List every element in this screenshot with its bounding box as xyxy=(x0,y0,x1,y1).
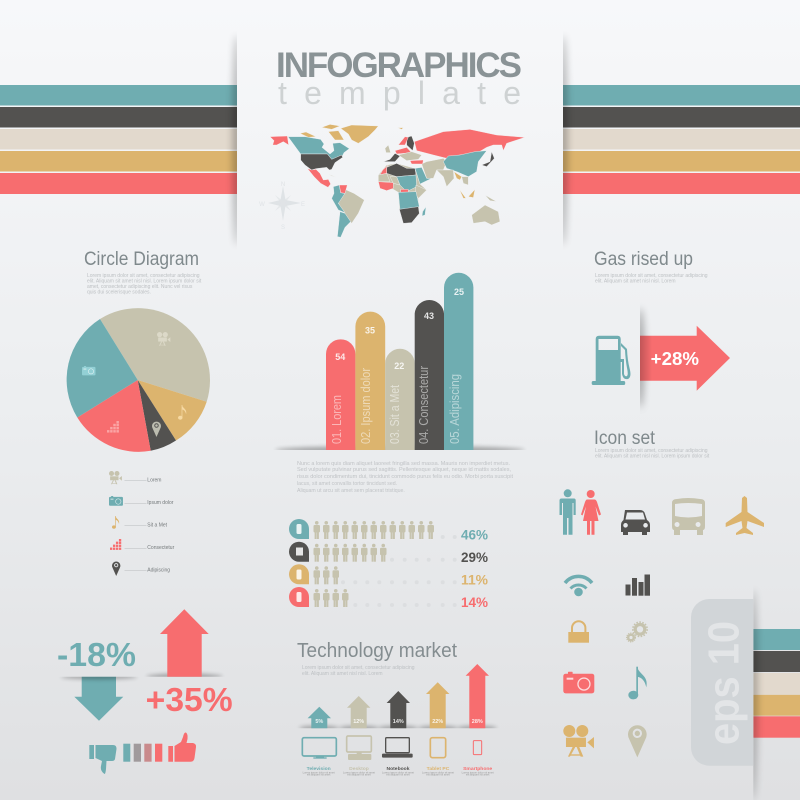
bar: ipsum dolor: 02. Ipsum dolor xyxy=(359,368,373,444)
device: tablet: Lorem ipsum dolor sit amet xyxy=(422,770,454,774)
heading: technology market: Technology market xyxy=(297,640,457,662)
compass: W xyxy=(259,202,265,208)
bar: consectetur: 43 xyxy=(424,311,434,321)
legend: sit a met: Sit a Met xyxy=(147,522,168,528)
arrow: down xyxy=(61,674,137,721)
device: smartphone: Smartphone xyxy=(463,766,492,772)
text: circle diagram description: elit. Aliquam sit amet nisl nisl. Lorem ipsum dolor sit xyxy=(87,278,202,284)
icon: gas pump xyxy=(592,336,630,385)
bar: sit a met xyxy=(385,349,415,450)
legend: ipsum dolor: Ipsum dolor xyxy=(147,500,174,506)
bar: lorem xyxy=(326,339,355,450)
arrow: 14%: 14% xyxy=(393,719,404,725)
device: notebook: Notebook xyxy=(387,766,410,772)
icon: signal bars xyxy=(626,574,650,596)
row: 14%: 14% xyxy=(461,594,489,610)
arrow: 5% xyxy=(308,707,331,728)
gas arrow xyxy=(636,308,730,408)
row: 29% xyxy=(289,542,489,565)
fold panel xyxy=(690,585,753,800)
device: notebook: elit aliquam sit amet xyxy=(386,773,410,777)
row: 29%: 29% xyxy=(461,549,489,565)
legend: adipiscing: Adipiscing xyxy=(147,568,170,574)
icon: camera xyxy=(563,672,594,693)
device: desktop: Lorem ipsum dolor sit amet xyxy=(343,770,375,774)
device: notebook xyxy=(382,738,414,777)
pie icon: video camera xyxy=(157,332,170,346)
text: bar chart description: Nunc a lorem quis diam aliquet laoreet fringilla sed massa. Mauris non imperdiet metus. xyxy=(297,461,510,467)
bar: consectetur: 04. Consectetur xyxy=(417,366,431,444)
icon: map pin xyxy=(628,725,647,757)
text: bar chart description: Sed vulputate pulvinar purus sed sagittis. Pellentesque aliquet, neque id mattis sodales, xyxy=(297,467,511,473)
text: bar chart description xyxy=(297,461,514,494)
device row xyxy=(302,736,494,777)
row: 11% xyxy=(289,564,489,588)
people chart xyxy=(289,519,489,610)
icon: bus xyxy=(672,498,705,535)
arrow: 12%: 12% xyxy=(353,719,364,725)
bar: lorem: 01. Lorem xyxy=(330,395,344,444)
bar: ipsum dolor xyxy=(355,312,385,450)
legend: lorem: Lorem xyxy=(147,478,161,484)
arrow label: +28% xyxy=(651,349,699,369)
row: 46%: 46% xyxy=(461,526,489,542)
arrow: 5%: 5% xyxy=(315,719,323,725)
scale bars xyxy=(123,744,162,762)
text: circle diagram description xyxy=(87,273,202,296)
device: television: elit aliquam sit amet xyxy=(307,773,331,777)
compass: S xyxy=(281,225,285,231)
top center panel xyxy=(237,0,563,262)
text: icon set description: elit. Aliquam sit amet nisl nisl. Lorem ipsum dolor sit xyxy=(595,454,710,460)
subtitle: template xyxy=(278,75,521,111)
device: tablet: elit aliquam sit amet xyxy=(426,773,450,777)
arrow: 22% xyxy=(426,682,449,728)
text: icon set description: Lorem ipsum dolor sit amet, consectetur adipiscing xyxy=(595,448,708,454)
icon: woman xyxy=(581,490,601,535)
arrow: 28%: 28% xyxy=(472,719,483,725)
icon: lock xyxy=(568,621,589,643)
row: 14% xyxy=(289,587,489,610)
pie icon: pin xyxy=(152,422,161,437)
top ribbon stripes xyxy=(0,85,800,194)
icon: man xyxy=(560,489,576,535)
legend: consectetur: Consectetur xyxy=(147,545,175,551)
device: notebook: Lorem ipsum dolor sit amet xyxy=(382,770,414,774)
icon: thumb down xyxy=(89,745,117,774)
top panel fold shadows xyxy=(233,35,567,245)
pie icon: camera xyxy=(82,366,95,375)
arrow: 14% xyxy=(387,691,410,728)
arrow: 22%: 22% xyxy=(432,719,443,725)
compass xyxy=(259,182,305,231)
heading: circle diagram: Circle Diagram xyxy=(84,249,199,270)
arrow: 28% xyxy=(466,664,489,728)
row: 11%: 11% xyxy=(461,572,489,588)
text: circle diagram description: Lorem ipsum dolor sit amet, consectetur adipiscing xyxy=(87,273,200,279)
device: smartphone: Lorem ipsum dolor sit amet xyxy=(462,770,494,774)
heading: gas rised up: Gas rised up xyxy=(594,249,693,270)
arrow: 12% xyxy=(347,696,370,728)
icon: thumb up xyxy=(168,732,196,762)
text: circle diagram description: quis dui scelerisque sodales. xyxy=(87,290,151,296)
compass: E xyxy=(301,202,305,208)
device: television: Television xyxy=(307,766,331,772)
tab: eps 10: eps 10 xyxy=(700,621,748,745)
bottom right ribbon stripes xyxy=(740,629,800,738)
text: gas description: elit. Aliquam sit amet nisl nisl. Lorem xyxy=(595,278,676,284)
icon: plane xyxy=(726,496,764,535)
heading: icon set: Icon set xyxy=(594,428,656,449)
bar: adipiscing: 05. Adipiscing xyxy=(448,374,462,444)
bar: adipiscing: 25 xyxy=(454,287,464,297)
bar: ipsum dolor: 35 xyxy=(365,326,375,336)
bar chart xyxy=(275,273,525,454)
text: bar chart description: Aliquam ut arcu sit amet sem placerat tristique. xyxy=(297,488,405,494)
icon: wifi xyxy=(565,576,592,596)
device: smartphone: elit aliquam sit amet xyxy=(466,773,490,777)
icon: music note xyxy=(628,667,647,699)
text: icon set description xyxy=(595,448,710,460)
pie chart xyxy=(67,308,210,452)
bar: sit a met: 03. Sit a Met xyxy=(388,385,402,444)
device: smartphone xyxy=(462,741,494,777)
device: tablet xyxy=(422,738,454,777)
text: circle diagram description: amet, consectetur adipiscing elit. Nunc vel risus xyxy=(87,284,193,290)
device: television: Lorem ipsum dolor sit amet xyxy=(303,770,335,774)
fold shadow xyxy=(749,590,757,800)
rating scale xyxy=(89,732,196,774)
bar: adipiscing xyxy=(444,273,473,450)
row: 46% xyxy=(289,519,489,542)
base shadow xyxy=(299,726,497,731)
text: bar chart description: risus dolor condimentum dui, tincidunt commodo purus felis eu odio. Morbi porta suscipit xyxy=(297,474,514,480)
compass: N xyxy=(281,182,285,188)
icon: car xyxy=(621,510,650,535)
pie icon: note xyxy=(178,405,186,420)
text: technology description: elit. Aliquam sit amet nisl nisl. Lorem xyxy=(302,671,383,677)
text: gas description: Lorem ipsum dolor sit amet, consectetur adipiscing xyxy=(595,273,708,279)
pie legend xyxy=(109,471,175,576)
device: desktop: elit aliquam sit amet xyxy=(347,773,371,777)
text: technology description: Lorem ipsum dolor sit amet, consectetur adipiscing xyxy=(302,665,415,671)
device: tablet: Tablet PC xyxy=(427,766,450,772)
device: desktop: Desktop xyxy=(349,766,369,772)
stat: +35%: +35% xyxy=(146,681,233,718)
title: INFOGRAPHICS xyxy=(276,46,522,85)
tab: eps 10 xyxy=(691,599,753,766)
pie icon: bars xyxy=(107,421,119,433)
stat: -18%: -18% xyxy=(57,636,136,673)
bar: consectetur xyxy=(415,300,444,450)
arrow: up xyxy=(146,609,222,680)
device: desktop xyxy=(343,736,375,777)
icon: video camera xyxy=(563,725,594,757)
text: gas description xyxy=(595,273,708,284)
technology arrows xyxy=(299,664,497,731)
world map xyxy=(270,124,525,237)
bar: sit a met: 22 xyxy=(394,361,404,371)
bar: lorem: 54 xyxy=(335,352,345,362)
device: television xyxy=(302,738,336,777)
icon: gears xyxy=(627,622,647,642)
text: technology description xyxy=(302,665,415,677)
text: bar chart description: lacus, sit amet convallis tortor tincidunt sed. xyxy=(297,481,397,487)
